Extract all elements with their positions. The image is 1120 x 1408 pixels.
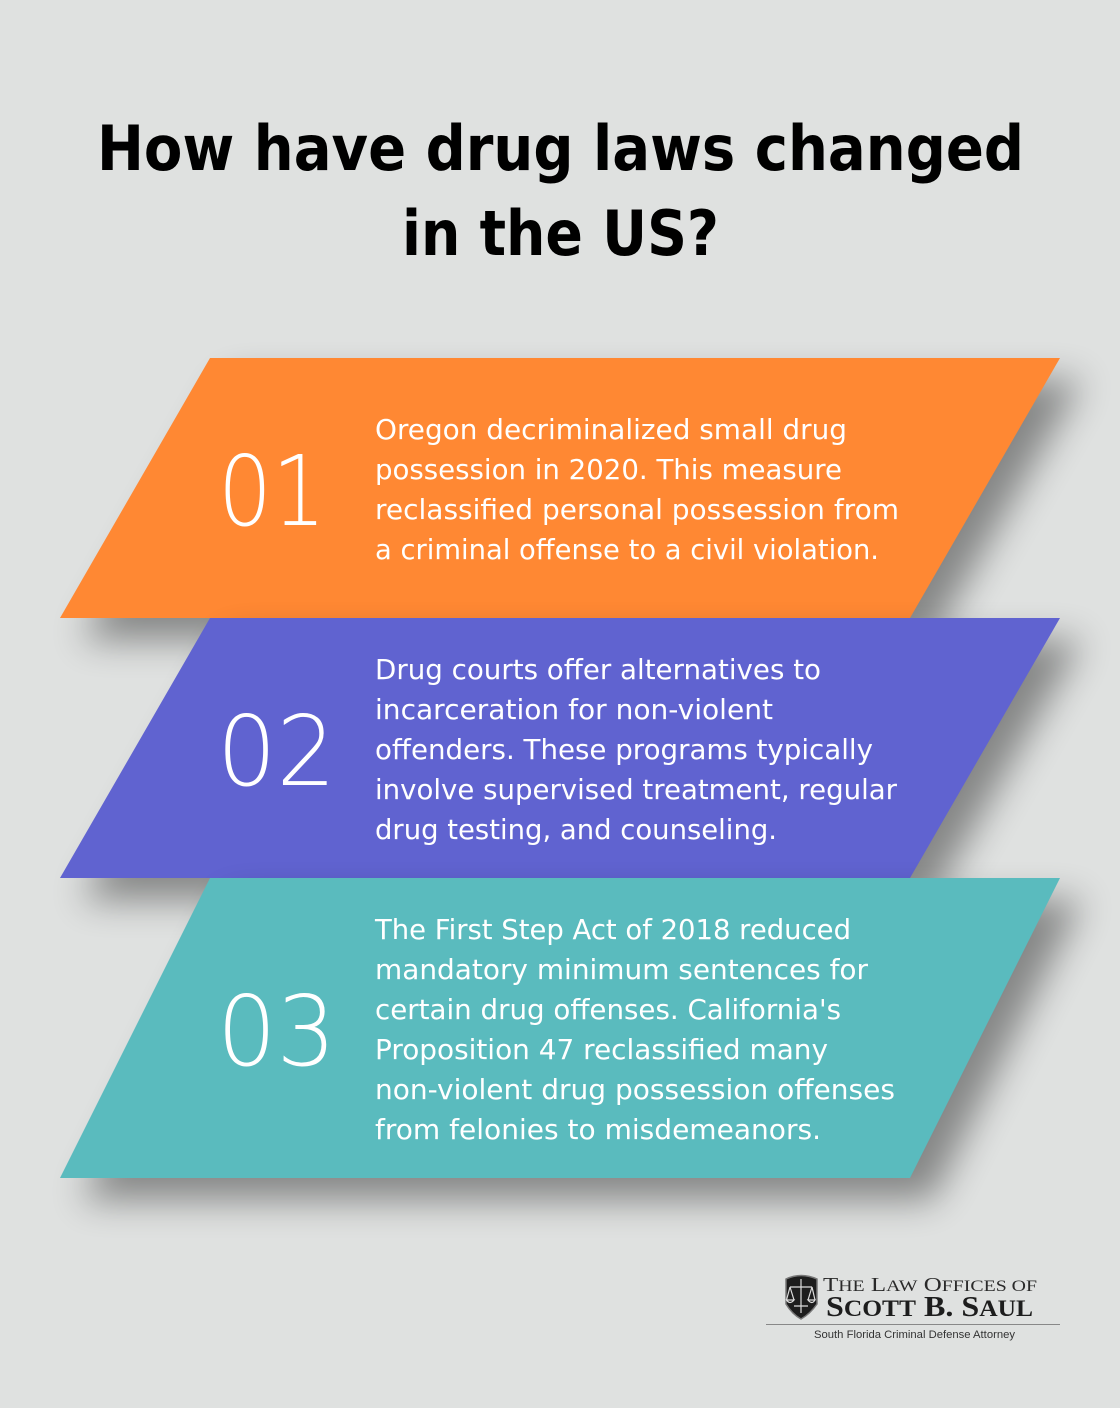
title — [97, 112, 1024, 270]
text: step 1: a criminal offense to a civil violation. — [375, 533, 879, 566]
title: in the US? — [402, 197, 719, 270]
number 03: 03 — [217, 975, 336, 1088]
panel: step 3 — [60, 878, 1082, 1200]
text: step 3: from felonies to misdemeanors. — [375, 1113, 821, 1146]
icon: shield with scales — [786, 1276, 817, 1319]
title: How have drug laws changed — [97, 112, 1024, 185]
text: step 3: The First Step Act of 2018 reduced — [374, 913, 851, 946]
text: step 2: offenders. These programs typically — [375, 733, 873, 766]
panel: step 2 — [60, 618, 1082, 900]
logo text: attorney name: SCOTT B. S AUL — [826, 1291, 1033, 1323]
band: purple — [60, 618, 1060, 878]
text: step 1: reclassified personal possession from — [375, 493, 899, 526]
text: step 3: mandatory minimum sentences for — [375, 953, 868, 986]
text: step 2: drug testing, and counseling. — [375, 813, 777, 846]
band: teal — [60, 878, 1060, 1178]
text: step 2: incarceration for non-violent — [375, 693, 773, 726]
logo text: firm name: THE L AW O FFICES OF — [823, 1275, 1037, 1296]
logo — [766, 1275, 1060, 1341]
text: step 1: possession in 2020. This measure — [375, 453, 842, 486]
text: step 3 — [374, 913, 895, 1146]
number 01: 01 — [218, 435, 326, 548]
number 02: 02 — [217, 695, 336, 808]
logo tagline: South Florida Criminal Defense Attorney — [814, 1329, 1016, 1341]
text: step 2 — [375, 653, 897, 846]
panel: step 1 — [60, 358, 1082, 640]
text: step 1 — [375, 413, 899, 566]
text: step 3: certain drug offenses. California's — [375, 993, 841, 1026]
text: step 2: involve supervised treatment, regular — [375, 773, 897, 806]
text: step 3: non-violent drug possession offenses — [375, 1073, 895, 1106]
text: step 2: Drug courts offer alternatives to — [375, 653, 821, 686]
text: step 3: Proposition 47 reclassified many — [375, 1033, 828, 1066]
band: orange — [60, 358, 1060, 618]
text: step 1: Oregon decriminalized small drug — [375, 413, 847, 446]
